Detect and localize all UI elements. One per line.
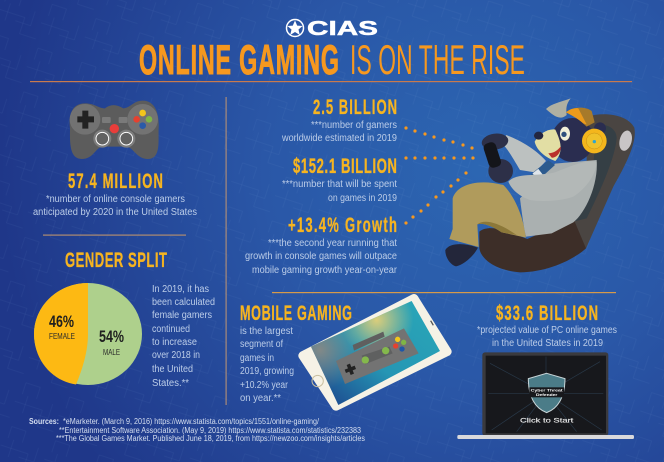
upper glove [481, 132, 509, 151]
pie chart: 54% [99, 327, 124, 346]
text block: gender note: over 2018 in [152, 350, 200, 361]
text block: gender note [152, 284, 215, 389]
text block: mobile note: segment of [240, 339, 283, 350]
foot [445, 244, 478, 266]
description: console gamers [33, 194, 197, 218]
icon: laptop [457, 352, 634, 439]
stat: 2.5 billion [281, 95, 397, 144]
heading: gender split: GENDER SPLIT [65, 248, 167, 272]
stat: 13.4 percent growth: growth in console games will outpace [245, 251, 397, 262]
stat: 13.4 percent growth: ***the second year running that [268, 238, 397, 249]
game controller [482, 141, 502, 169]
stat: 33.6 billion: $33.6 BILLION [496, 301, 598, 325]
description: PC games: *projected value of PC online games [477, 325, 617, 336]
stat: 13.4 percent growth: mobile gaming growth year-on-year [252, 265, 398, 276]
description: console gamers: anticipated by 2020 in the United States [33, 207, 197, 218]
muzzle [535, 129, 561, 161]
text block: mobile note [240, 326, 294, 404]
panel: PC online games [457, 301, 634, 439]
panel: global stats [245, 95, 398, 276]
description: console gamers: *number of online console gamers [46, 194, 185, 205]
stat: 13.4 percent growth [245, 213, 398, 276]
dotted connectors [404, 126, 475, 225]
head [551, 118, 594, 162]
text block: mobile note: is the largest [240, 326, 293, 337]
stat: 2.5 billion: 2.5 BILLION [313, 95, 397, 119]
panel: console gamers [33, 101, 197, 218]
stat: 152.1 billion: $152.1 BILLION [293, 154, 397, 178]
chair back [567, 114, 635, 248]
sources: ***The Global Games Market. Published June 18, 2019, from https://newzoo.com/insights/articles [56, 434, 365, 443]
hoodie body [520, 160, 597, 237]
text block: mobile note: games in [240, 353, 274, 364]
ear [594, 122, 606, 134]
eye [560, 127, 570, 141]
stat: 152.1 billion: ***number that will be spent [282, 179, 397, 190]
stat: 57.4 million: 57.4 MILLION [68, 169, 163, 193]
pie chart [34, 283, 142, 385]
icon: laptop: Defender [536, 393, 558, 397]
pie chart: 46% [49, 312, 74, 331]
stat: 152.1 billion [282, 154, 397, 204]
description: PC games [477, 325, 617, 349]
pie chart: FEMALE [49, 332, 75, 341]
sources: Sources: [29, 417, 59, 426]
chair seat [479, 218, 586, 272]
trousers [449, 182, 526, 247]
icon: laptop: Click to Start [520, 417, 574, 424]
text block: gender note: States.** [152, 378, 189, 389]
title: IS ON THE RISE [350, 38, 525, 84]
lower glove [488, 159, 513, 183]
pie chart: MALE [103, 348, 120, 357]
text block: gender note: continued [152, 324, 190, 335]
text block: gender note: to increase [152, 337, 197, 348]
cap [566, 108, 595, 127]
text block: gender note: female gamers [152, 310, 212, 321]
sources: **Entertainment Software Association. (May 9, 2019) https://www.statista.com/statistics/232383 [59, 426, 361, 435]
nose [534, 132, 543, 140]
text block: mobile note: 2019, growing [240, 366, 294, 377]
text block: mobile note: on year.** [240, 393, 281, 404]
title: ONLINE GAMING [139, 38, 339, 84]
text block: gender note: been calculated [152, 297, 215, 308]
illustration: bear mascot in gaming chair [445, 98, 635, 272]
mouth [548, 147, 561, 158]
panel: mobile gaming [240, 298, 447, 406]
heading: mobile gaming: MOBILE GAMING [240, 301, 352, 325]
headphone [582, 129, 607, 153]
hair [546, 98, 571, 118]
chair speaker [617, 129, 634, 152]
logo: CIAS: CIAS [307, 18, 378, 40]
stat: 2.5 billion: ***number of gamers [311, 120, 397, 131]
text block: gender note: the United [152, 364, 193, 375]
icon: game controller [70, 101, 159, 159]
icon: smartphone [303, 298, 447, 406]
hoodie near sleeve [508, 161, 597, 201]
description: PC games: in the United States in 2019 [492, 338, 603, 349]
stat: 13.4 percent growth: +13.4% Growth [288, 213, 397, 237]
title [139, 38, 525, 84]
stat: 2.5 billion: worldwide estimated in 2019 [281, 133, 397, 144]
logo: CIAS [286, 18, 378, 40]
text block: gender note: In 2019, it has [152, 284, 209, 295]
text block: mobile note: +10.2% year [240, 380, 289, 391]
icon: laptop: Cyber Threat [531, 388, 564, 392]
sources: *eMarketer. (March 9, 2016) https://www.statista.com/topics/1551/online-gaming/ [63, 417, 320, 426]
hoodie lanyard [531, 160, 555, 181]
panel: gender split [34, 248, 215, 389]
stat: 152.1 billion: on games in 2019 [328, 193, 397, 204]
hoodie far sleeve [504, 135, 546, 172]
sources [29, 417, 365, 443]
